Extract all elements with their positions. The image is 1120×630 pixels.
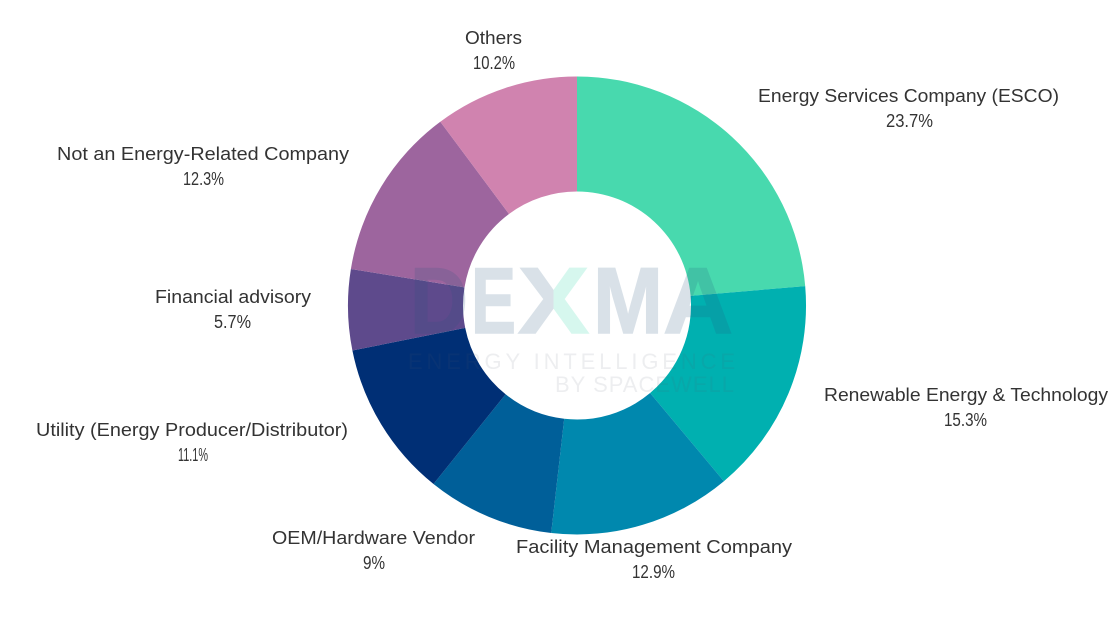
label: Renewable Energy & Technology: 15.3% (944, 410, 987, 430)
label: Others: 10.2% (473, 53, 515, 73)
slice: Not an Energy-Related Company (351, 122, 509, 287)
logo tagline: ENERGY INTELLIGENCE (408, 349, 735, 374)
logo wordmark (414, 268, 732, 334)
label: Not an Energy-Related Company (57, 144, 349, 189)
label: Not an Energy-Related Company: 12.3% (183, 169, 224, 189)
label: Others (465, 28, 522, 73)
label: Utility (36, 420, 348, 465)
label: Facility Management Company: Facility Management Company (516, 537, 792, 557)
slice: OEM/Hardware Vendor (434, 394, 564, 533)
donut chart (348, 76, 806, 534)
label: Not an Energy-Related Company: Not an Energy-Related Company (57, 144, 349, 164)
label: Financial advisory: Financial advisory (155, 287, 311, 307)
watermark logo (414, 268, 734, 392)
label: Energy Services Company: Energy Services Company (ESCO) (758, 86, 1059, 106)
slice: Facility Management Company (551, 393, 724, 534)
logo wordmark: E (471, 248, 516, 353)
logo wordmark: A (663, 248, 733, 353)
slice: Financial advisory (348, 269, 465, 350)
slice: Utility (352, 328, 506, 484)
label: Facility Management Company (516, 537, 792, 582)
label: Energy Services Company (758, 86, 1059, 131)
label: OEM/Hardware Vendor: 9% (363, 553, 385, 573)
label: Facility Management Company: 12.9% (632, 562, 675, 582)
logo wordmark: D (410, 248, 468, 353)
logo wordmark: X (518, 248, 589, 353)
label: Utility: 11.1% (178, 445, 208, 465)
label: OEM/Hardware Vendor (272, 528, 475, 573)
label: OEM/Hardware Vendor: OEM/Hardware Vendor (272, 528, 475, 548)
logo byline: BY SPACEWELL (555, 372, 734, 397)
label: Utility: Utility (Energy Producer/Distributor) (36, 420, 348, 440)
logo wordmark: M (593, 248, 663, 353)
label: Financial advisory (155, 287, 311, 332)
slice: Energy Services Company (577, 76, 805, 296)
slice: Others (440, 76, 577, 214)
slice: Renewable Energy & Technology (650, 286, 806, 481)
label: Energy Services Company: 23.7% (886, 111, 933, 131)
label: Renewable Energy & Technology: Renewable Energy & Technology (824, 385, 1108, 405)
label: Financial advisory: 5.7% (214, 312, 251, 332)
label: Others: Others (465, 28, 522, 48)
label: Renewable Energy & Technology (824, 385, 1108, 430)
logo wordmark: X (518, 248, 589, 353)
